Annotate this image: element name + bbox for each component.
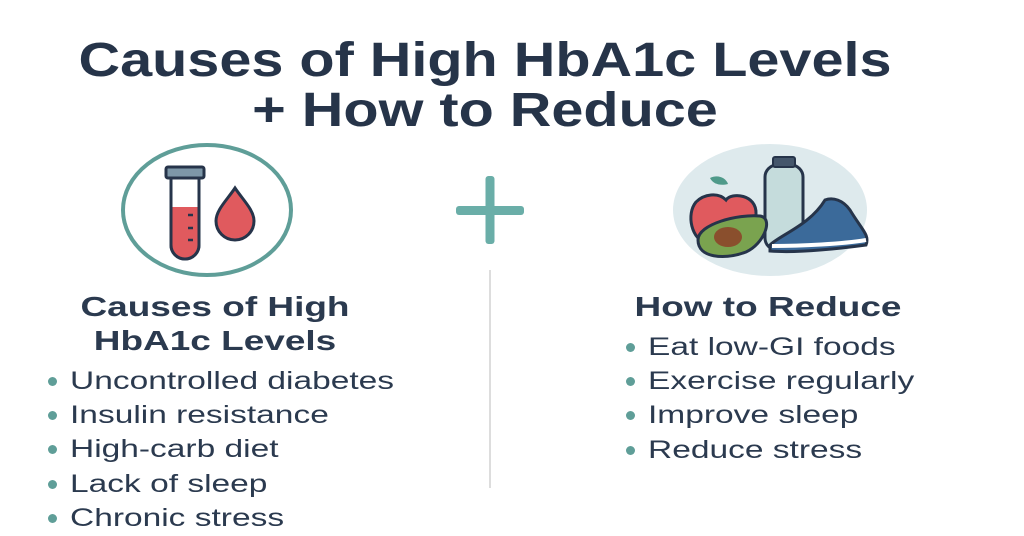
icon: plus — [456, 176, 524, 244]
heading: causes: Causes of High — [80, 291, 350, 322]
list: reduce: Exercise regularly — [648, 367, 914, 395]
title: Causes of High HbA1c Levels — [78, 34, 892, 87]
list: causes — [48, 367, 394, 532]
title — [78, 34, 892, 137]
list: causes: Chronic stress — [70, 504, 284, 532]
title: + How to Reduce — [252, 84, 718, 137]
list: reduce: Eat low-GI foods — [648, 333, 896, 361]
heading: how to reduce: How to Reduce — [635, 291, 901, 322]
list: reduce: Improve sleep — [648, 401, 858, 429]
list: reduce — [626, 333, 914, 464]
list: causes: Insulin resistance — [70, 401, 329, 429]
icon: test tube and blood drop — [121, 143, 293, 277]
divider — [489, 270, 491, 488]
list: reduce: Reduce stress — [648, 436, 862, 464]
icon: apple avocado bottle shoe — [673, 144, 868, 276]
list: causes: Lack of sleep — [70, 470, 267, 498]
heading: causes: HbA1c Levels — [94, 325, 336, 356]
heading: causes — [80, 291, 350, 356]
list: causes: High-carb diet — [70, 435, 279, 463]
list: causes: Uncontrolled diabetes — [70, 367, 394, 395]
